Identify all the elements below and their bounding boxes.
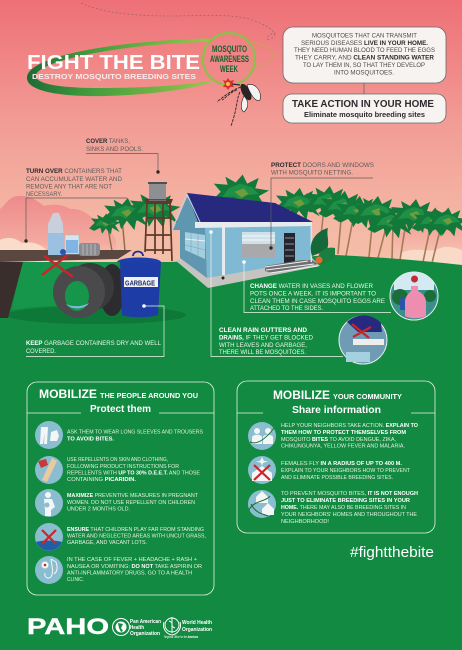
heading: YOUR COMMUNITY: [333, 394, 402, 401]
text box: intro: THEY CARRY, AND CLEAN STANDING WATER: [295, 56, 435, 62]
item: help neighbors: MOSQUITO BITES TO AVOID DENGUE, ZIKA,: [281, 437, 396, 443]
lid: [60, 249, 66, 255]
logo: World Health Organization Americas: [163, 617, 212, 639]
callout: clean rain gutters: CLEAN RAIN GUTTERS AND: [219, 328, 308, 334]
logo: PAHO: PAHO: [27, 614, 109, 639]
palm trees right: [318, 191, 462, 263]
item: pregnant women: WOMEN. DO NOT USE REPELLENT ON CHILDREN: [67, 500, 195, 506]
callout: turn over containers: REMOVE ANY THAT ARE NOT: [26, 184, 112, 190]
tin can: [79, 243, 100, 256]
callout: keep garbage containers covered: COVERED.: [26, 349, 56, 355]
callout: protect doors and windows: [269, 163, 374, 250]
porch post: [310, 225, 312, 262]
callout: protect doors and windows: WITH MOSQUITO NETTING.: [271, 170, 353, 176]
item: repellent: USE REPELLENTS ON SKIN AND CLOTHING,: [67, 457, 168, 463]
text box: intro: [283, 27, 446, 83]
callout: clean rain gutters: THERE WILL BE MOSQUITOES.: [219, 350, 306, 356]
text box: intro: SERIOUS DISEASES LIVE IN YOUR HOME.: [301, 41, 428, 47]
background sky: [0, 0, 462, 300]
tyres with red cross: [42, 255, 125, 318]
callout: cover tanks: [86, 139, 160, 174]
logo: World Health Organization Americas: Organization: [182, 627, 212, 633]
callout: protect doors and windows: PROTECT DOORS AND WINDOWS: [271, 163, 374, 169]
item: clothing: TO AVOID BITES.: [67, 436, 115, 442]
heading: MOBILIZE: [273, 390, 330, 402]
item: repellent: CONTAINING PICARIDIN.: [67, 477, 137, 483]
green swoosh: [27, 38, 218, 96]
palm trees behind house: [210, 174, 352, 254]
item: neighborhood: TO PREVENT MOSQUITO BITES, IT IS NOT ENOUGH: [281, 491, 418, 497]
item: neighborhood: YOUR NEIGHBORS' HOMES AND THROUGHOUT THE: [281, 512, 417, 518]
item: repellent: FOLLOWING PRODUCT INSTRUCTIONS FOR: [67, 464, 179, 470]
gable trim: [172, 194, 200, 230]
callout: change water in vases: [242, 260, 391, 312]
panel: mobilize the people around you: [27, 382, 214, 595]
house: [172, 193, 320, 288]
glass: [65, 235, 79, 254]
downspout: [222, 227, 225, 275]
connector between boxes: [363, 83, 365, 94]
callout: turn over containers: [24, 169, 127, 243]
panel: mobilize your community: [237, 381, 435, 533]
item: repellent: REPELLENTS WITH UP TO 30% D.E.E.T. AND THOSE: [67, 470, 200, 476]
text box: take action: TAKE ACTION IN YOUR HOME: [292, 99, 434, 110]
dashed flight path of mosquito: [81, 3, 276, 39]
foundation: [175, 258, 320, 288]
heading: [39, 389, 198, 415]
callout: clean rain gutters: WITH LEAVES AND GARBAGE,: [219, 343, 307, 349]
item: repellent: [35, 456, 200, 484]
logo: World Health Organization Americas: Regional Office for the Americas: [164, 635, 198, 639]
item: help neighbors: HELP YOUR NEIGHBORS TAKE ACTION. EXPLAIN TO: [281, 423, 418, 429]
item: help neighbors: CHIKUNGUNYA, YELLOW FEVER AND MALARIA.: [281, 444, 405, 450]
heading: THE PEOPLE AROUND YOU: [100, 393, 198, 400]
green ground: [0, 255, 462, 650]
logo: Pan American Health Organization: Organization: [130, 631, 160, 637]
item: flight radius: EXPLAIN TO YOUR NEIGHBORS HOW TO PREVENT: [281, 468, 411, 474]
heading: Protect them: [90, 404, 151, 415]
callout: change water in vases: CHANGE WATER IN VASES AND FLOWER: [250, 284, 374, 290]
dark ground shadow: [6, 306, 186, 324]
dot on house foundation: [222, 276, 224, 280]
text box: intro: MOSQUITOES THAT CAN TRANSMIT: [312, 34, 417, 40]
heading: [273, 390, 402, 416]
bottle: [48, 213, 64, 255]
callout: turn over containers: TURN OVER CONTAINERS THAT: [26, 169, 122, 175]
item: neighborhood: HOME. THERE MAY ALSO BE BREEDING SITES IN: [281, 505, 406, 511]
text box: intro: THEY NEED HUMAN BLOOD TO FEED THE EGGS: [294, 48, 435, 54]
item: fever: IN THE CASE OF FEVER + HEADACHE + RASH +: [67, 557, 197, 563]
callout: change water in vases: CLEAN THEM IN CASE MOSQUITO EGGS ARE: [250, 299, 385, 305]
callout: change water in vases: POTS ONCE A WEEK. IT IS IMPORTANT TO: [250, 292, 376, 298]
logo: World Health Organization Americas: World Health: [182, 620, 212, 626]
side window: [185, 232, 205, 259]
item: children standing water: [35, 523, 206, 551]
logo: Pan American Health Organization: [112, 618, 161, 637]
detail circle: gutter: [339, 315, 387, 364]
item: flight radius: [248, 456, 411, 484]
callout: clean rain gutters: DRAINS, IF THEY GET BLOCKED: [219, 336, 314, 342]
callout: clean rain gutters: [209, 230, 343, 356]
item: fever: [35, 556, 202, 584]
callout: change water in vases: ATTACHED TO THE SIDES.: [250, 306, 323, 312]
hashtag: #fightthebite: [350, 544, 434, 561]
garbage can: GARBAGE: [125, 278, 155, 288]
table with containers: [0, 213, 132, 318]
lighter green patch: [12, 262, 118, 310]
callout: turn over containers: NECESSARY.: [26, 192, 62, 198]
item: clothing: [35, 421, 203, 449]
text box: intro: TO LAY THEM IN, SO THAT THEY DEVELOP: [303, 63, 425, 69]
steps: [265, 260, 318, 273]
item: children standing water: WATER AND NEGLECTED AREAS WITH UNCUT GRASS,: [67, 534, 206, 540]
badge: mosquito awareness week: AWARENESS: [210, 54, 249, 65]
icon: mosquito: [217, 78, 260, 126]
item: children standing water: GARBAGE, AND VACANT LOTS.: [67, 540, 147, 546]
heading: MOBILIZE: [39, 389, 97, 401]
item: flight radius: FEMALES FLY IN A RADIUS OF UP TO 400 M.: [281, 461, 403, 467]
front window: [242, 232, 275, 257]
callout: cover tanks: COVER TANKS,: [86, 139, 130, 145]
front wall: [205, 223, 312, 278]
item: fever: NAUSEA OR VOMITING: DO NOT TAKE ASPIRIN OR: [67, 564, 202, 570]
badge: mosquito awareness week: [203, 33, 255, 85]
badge: mosquito awareness week: WEEK: [220, 64, 238, 75]
item: clothing: ASK THEM TO WEAR LONG SLEEVES AND TROUSERS: [67, 430, 203, 436]
clouds on horizon: [0, 196, 462, 268]
item: pregnant women: MAXIMIZE PREVENTIVE MEASURES IN PREGNANT: [67, 493, 199, 499]
water tower: [144, 182, 173, 261]
title: FIGHT THE BITE: [27, 52, 200, 74]
callout: turn over containers: CAN ACCUMULATE WATER AND: [26, 177, 123, 183]
gutter: [195, 222, 312, 228]
item: help neighbors: THEM HOW TO PROTECT THEMSELVES FROM: [281, 430, 407, 436]
callout: cover tanks: SINKS AND POOLS.: [86, 147, 143, 153]
title block: [27, 38, 274, 96]
side wall: [173, 197, 207, 278]
item: fever: ANTI-INFLAMMATORY DRUGS. GO TO A HEALTH: [67, 570, 192, 576]
bushes by house: [311, 228, 335, 264]
item: neighborhood: [248, 490, 418, 525]
callout: keep garbage containers covered: [26, 304, 164, 356]
logo: Pan American Health Organization: Health: [130, 625, 144, 631]
text box: take action: Eliminate mosquito breeding sites: [304, 110, 425, 119]
item: neighborhood: JUST TO ELIMINATE BREEDING SITES IN YOUR: [281, 498, 410, 504]
item: pregnant women: [35, 489, 199, 517]
roof: [187, 193, 313, 222]
text box: intro: INTO MOSQUITOES.: [334, 70, 394, 76]
thin tan swoosh: [248, 42, 274, 69]
door: [284, 233, 295, 263]
detail circle: flower vase: [390, 272, 438, 320]
heading: Share information: [292, 405, 381, 416]
item: help neighbors: [248, 422, 418, 450]
item: flight radius: AND ELIMINATE POSSIBLE BREEDING SITES.: [281, 475, 393, 481]
garbage can: [117, 252, 161, 317]
logo: Pan American Health Organization: Pan American: [130, 619, 161, 625]
subtitle: DESTROY MOSQUITO BREEDING SITES: [32, 72, 196, 81]
item: pregnant women: UNDER 2 MONTHS OLD.: [67, 506, 130, 512]
item: fever: CLINIC.: [67, 577, 84, 583]
item: children standing water: ENSURE THAT CHILDREN PLAY FAR FROM STANDING: [67, 527, 204, 533]
palm trees left: [89, 192, 180, 251]
callout: keep garbage containers covered: KEEP GARBAGE CONTAINERS DRY AND WELL: [26, 341, 162, 347]
item: neighborhood: NEIGHBORHOOD!: [281, 519, 330, 525]
badge: mosquito awareness week: MOSQUITO: [212, 44, 247, 55]
text box: take action: [283, 94, 446, 123]
